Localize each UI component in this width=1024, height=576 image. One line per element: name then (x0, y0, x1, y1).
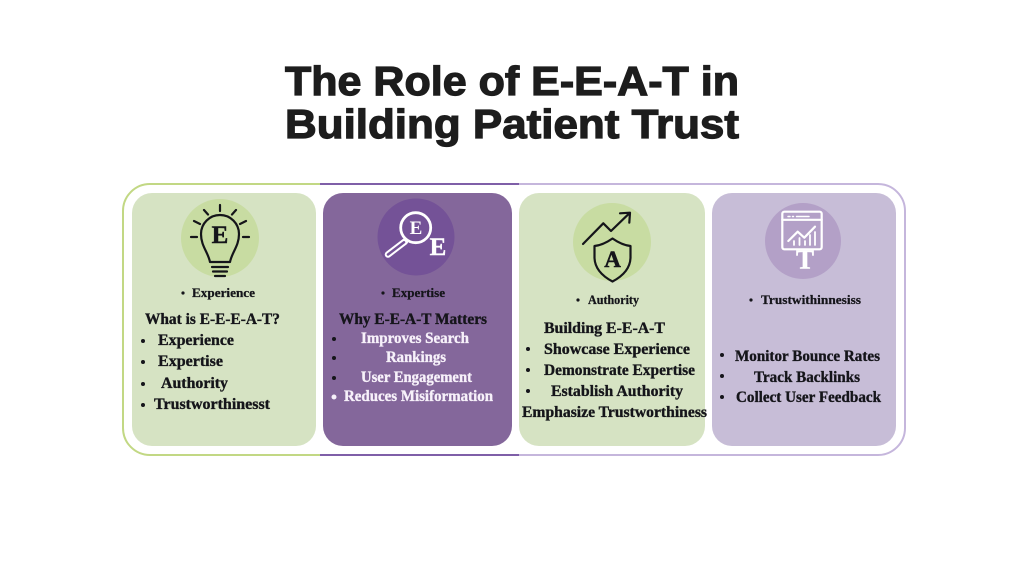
outer rounded frame (123, 184, 905, 455)
icon: light bulb with E (181, 199, 259, 277)
label: experience: Experience (192, 286, 255, 300)
text block: what is E-E-E-A-T: What is E-E-E-A-T? (145, 311, 280, 328)
icon: shield with rising arrow (573, 203, 651, 282)
text block: building E-E-A-T: Showcase Experience (544, 341, 690, 358)
text block: what is E-E-E-A-T: Experience (158, 332, 234, 349)
panel background: experience (132, 193, 316, 446)
panel background: authority (519, 193, 705, 446)
panel: experience (132, 193, 316, 446)
title: The Role of E-E-A-T in (285, 58, 739, 104)
panel: trustworthiness (712, 193, 896, 446)
panel background: trustworthiness (712, 193, 896, 446)
text block: monitoring list: Monitor Bounce Rates (735, 348, 880, 365)
icon: magnifier with E: E (410, 218, 422, 239)
text block: building E-E-A-T: Building E-E-A-T (544, 320, 665, 337)
icon: analytics board with T: T (796, 244, 814, 274)
text block: why E-E-A-T matters: Why E-E-A-T Matters (339, 311, 487, 328)
icon: magnifier with E: E (430, 234, 446, 261)
title (285, 58, 739, 147)
text block: monitoring list: Collect User Feedback (736, 389, 881, 406)
panel background: expertise (323, 193, 512, 446)
text block: why E-E-A-T matters: Reduces Misiformation (344, 388, 493, 405)
text block: building E-E-A-T: Establish Authority (551, 383, 683, 400)
label: expertise: Expertise (392, 286, 445, 300)
text block: building E-E-A-T: Emphasize Trustworthiness (522, 404, 707, 421)
text block: monitoring list: Track Backlinks (754, 369, 860, 386)
text block: building E-E-A-T: Demonstrate Expertise (544, 362, 695, 379)
text block: building E-E-A-T (522, 320, 707, 421)
icon: analytics board with T (765, 203, 841, 279)
text block: why E-E-A-T matters (332, 311, 493, 405)
label: trustwithinnesiss: Trustwithinnesiss (761, 293, 861, 307)
label: authority: Authority (588, 293, 640, 307)
text block: monitoring list (720, 348, 881, 406)
text block: what is E-E-E-A-T: Expertise (158, 353, 223, 370)
text block: what is E-E-E-A-T (141, 311, 280, 413)
text block: what is E-E-E-A-T: Trustworthinesst (154, 396, 271, 413)
icon: magnifier with E (378, 198, 454, 276)
text block: why E-E-A-T matters: Improves Search (361, 330, 469, 347)
title: Building Patient Trust (285, 101, 739, 147)
panel: authority (519, 193, 707, 446)
text block: why E-E-A-T matters: User Engagement (361, 369, 473, 386)
icon: shield with rising arrow: A (604, 247, 621, 272)
panel: expertise (323, 193, 512, 446)
text block: why E-E-A-T matters: Rankings (386, 349, 446, 366)
icon: light bulb with E: E (212, 222, 228, 249)
text block: what is E-E-E-A-T: Authority (161, 375, 228, 392)
